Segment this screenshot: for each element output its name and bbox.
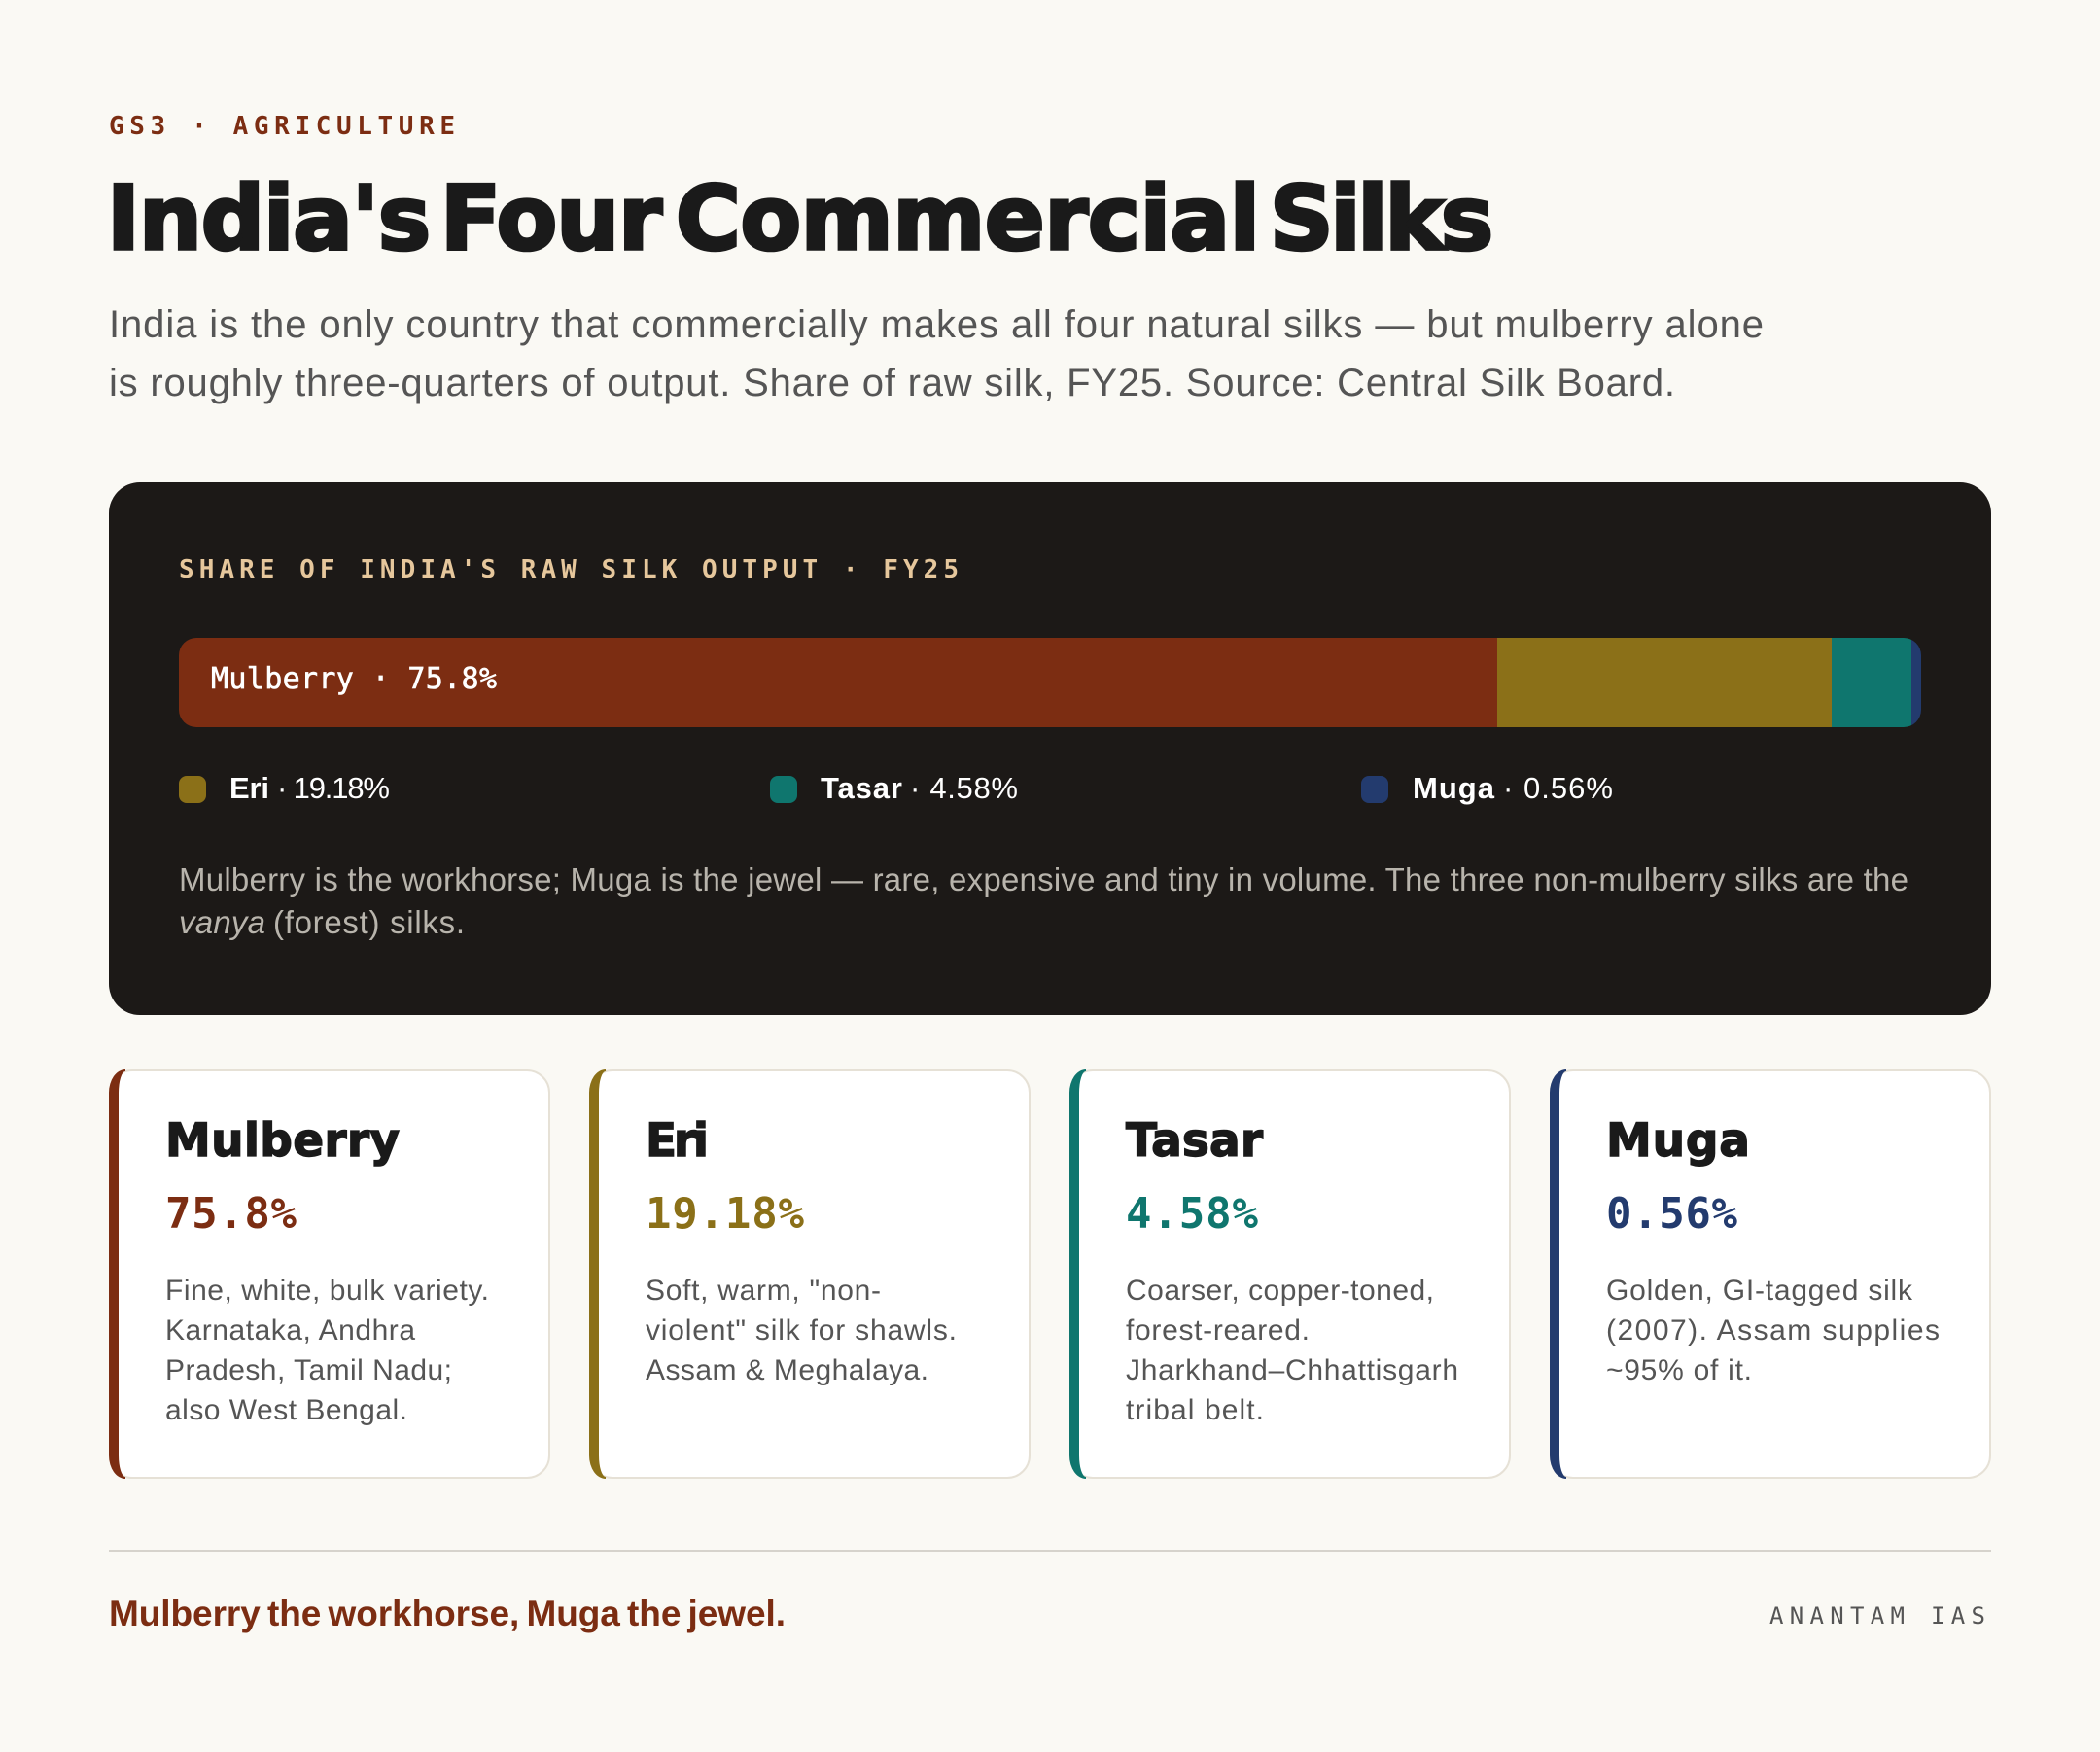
card description: Golden, GI-tagged silk xyxy=(1606,1275,1913,1307)
card value: 19.18% xyxy=(646,1189,805,1239)
card description: forest-reared. xyxy=(1126,1314,1310,1347)
card description: ~95% of it. xyxy=(1606,1354,1752,1386)
card description: also West Bengal. xyxy=(165,1394,407,1426)
card description: Pradesh, Tamil Nadu; xyxy=(165,1354,452,1386)
panel heading: SHARE OF INDIA'S RAW SILK OUTPUT · FY25 xyxy=(179,555,959,584)
legend: Muga xyxy=(1361,771,1613,805)
panel: share of raw silk output xyxy=(109,482,1991,1015)
footer brand: ANANTAM IAS xyxy=(1769,1602,1985,1629)
card value: 4.58% xyxy=(1126,1189,1258,1239)
legend: Eri: · 19.18% xyxy=(277,771,390,805)
card value: 0.56% xyxy=(1606,1189,1738,1239)
card description: Jharkhand–Chhattisgarh xyxy=(1126,1354,1458,1386)
legend: Tasar: · 4.58% xyxy=(910,771,1018,805)
card description xyxy=(165,1275,489,1426)
card title: Tasar xyxy=(1126,1114,1264,1168)
panel note: Mulberry is the workhorse; Muga is the jewel — rare, expensive and tiny in volume. The three non-mulberry silks are the xyxy=(179,861,1908,897)
legend: Muga: Muga xyxy=(1413,771,1495,805)
card description: Soft, warm, "non- xyxy=(646,1275,881,1307)
title: Silks xyxy=(1270,168,1493,270)
legend: Tasar: Tasar xyxy=(821,771,902,805)
card: Eri xyxy=(589,1069,1030,1479)
footer tagline: Mulberry the workhorse, Muga the jewel. xyxy=(109,1594,786,1633)
subtitle: is roughly three-quarters of output. Share of raw silk, FY25. Source: Central Silk Board. xyxy=(109,362,1675,404)
card: Mulberry xyxy=(109,1069,549,1479)
title: Commercial xyxy=(676,168,1260,270)
title xyxy=(107,168,1493,270)
panel note xyxy=(179,861,1908,940)
subtitle: India is the only country that commercially makes all four natural silks — but mulberry alone xyxy=(109,303,1764,346)
legend: Eri xyxy=(179,771,390,805)
card value: 75.8% xyxy=(165,1189,298,1239)
panel note: vanya xyxy=(179,904,265,940)
stacked share bar xyxy=(179,638,1921,727)
title: India's xyxy=(107,168,431,270)
subtitle xyxy=(109,303,1764,404)
card description: Assam & Meghalaya. xyxy=(646,1354,928,1386)
legend: Muga: · 0.56% xyxy=(1503,771,1613,805)
card description: Fine, white, bulk variety. xyxy=(165,1275,489,1307)
card description: Coarser, copper-toned, xyxy=(1126,1275,1434,1307)
card title: Eri xyxy=(646,1114,709,1168)
card description: (2007). Assam supplies xyxy=(1606,1314,1940,1347)
card title: Mulberry xyxy=(165,1114,400,1168)
card description: violent" silk for shawls. xyxy=(646,1314,957,1347)
card description: tribal belt. xyxy=(1126,1394,1264,1426)
legend: Eri: Eri xyxy=(229,771,269,805)
card title: Muga xyxy=(1606,1114,1750,1168)
eyebrow: GS3 · AGRICULTURE xyxy=(109,112,455,141)
bar label: mulberry: Mulberry · 75.8% xyxy=(211,662,497,696)
card: Tasar xyxy=(1069,1069,1510,1479)
title: Four xyxy=(440,168,662,270)
legend: Tasar xyxy=(770,771,1018,805)
card description xyxy=(1126,1275,1458,1426)
card: Muga xyxy=(1550,1069,1990,1479)
panel note: (forest) silks. xyxy=(273,904,465,940)
card description xyxy=(646,1275,957,1386)
card description: Karnataka, Andhra xyxy=(165,1314,415,1347)
card description xyxy=(1606,1275,1940,1386)
